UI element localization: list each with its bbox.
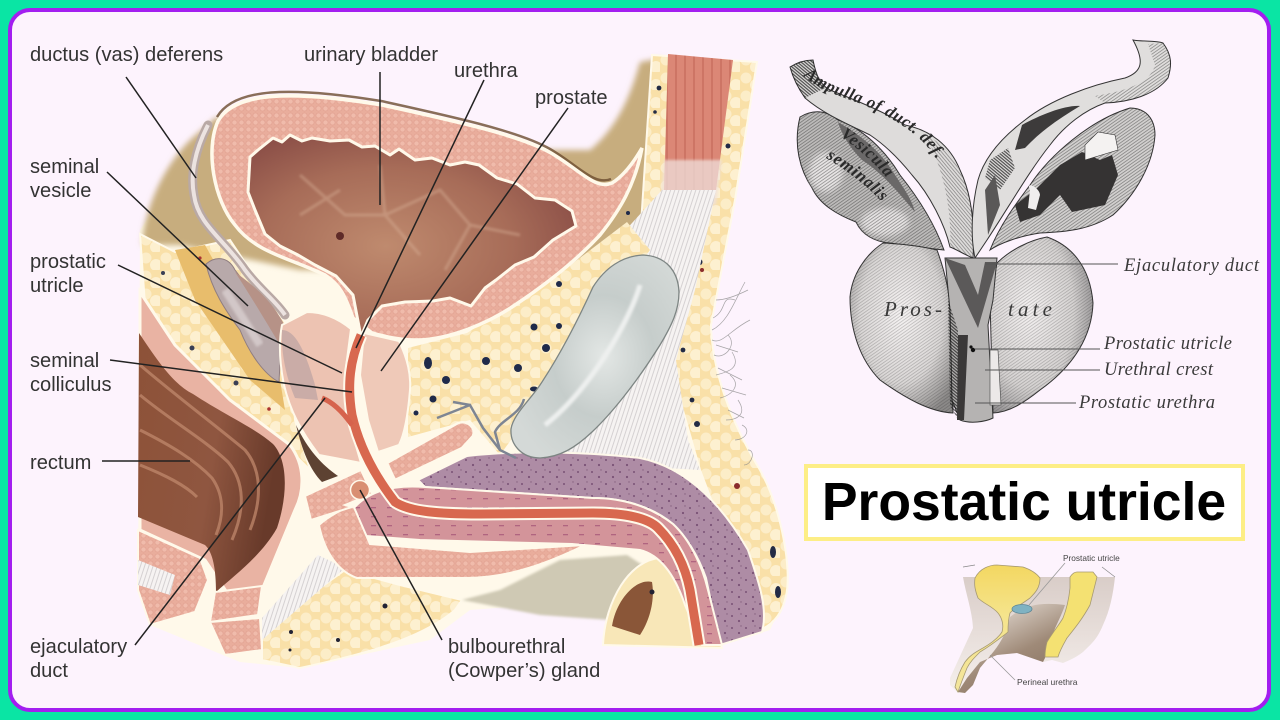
small labels <box>990 553 1120 687</box>
bladder lumen <box>248 135 576 337</box>
label: perineal urethra: Perineal urethra <box>1017 677 1078 687</box>
gray pubic symphysis <box>511 255 679 458</box>
prostate right lobe <box>990 237 1093 413</box>
pelvis body outline <box>950 565 1115 693</box>
cream base <box>138 55 788 668</box>
label: bulbourethral gland <box>360 490 600 682</box>
prevesical fat <box>408 211 650 455</box>
panel: pelvic anatomy illustration <box>138 54 788 668</box>
label: prostate: prostate <box>535 87 608 109</box>
label: ejaculatory duct: duct <box>30 660 68 682</box>
label: ductus deferens <box>30 44 223 178</box>
panel: engraving of prostate and seminal vesicles <box>789 39 1260 423</box>
dorsal vessels <box>437 399 524 458</box>
anal stripes <box>138 560 175 595</box>
label: ejaculatory duct: ejaculatory <box>30 636 127 658</box>
purple corpus cavernosum <box>418 452 764 645</box>
engraving labels <box>802 70 1260 413</box>
label: bulbourethral gland: bulbourethral <box>448 636 565 658</box>
panel: small urethra diagram <box>950 553 1120 693</box>
bulbourethral gland <box>350 480 370 500</box>
utricle blue <box>1012 604 1032 614</box>
ductus deferens tube <box>193 125 285 315</box>
label: ductus deferens: ductus (vas) deferens <box>30 44 223 66</box>
label: seminalis: seminalis <box>826 152 887 200</box>
left seminal vesicle <box>797 112 944 250</box>
scrotal shadow area <box>462 555 650 620</box>
label: seminal colliculus: seminal <box>30 350 99 372</box>
label: ejaculatory duct: Ejaculatory duct <box>1123 256 1260 276</box>
label: vesicula: Vesicula <box>843 128 892 177</box>
label: prostatic utricle: prostatic <box>30 251 106 273</box>
anal sphincter blocks <box>138 530 262 655</box>
hair <box>712 282 752 465</box>
label: seminal colliculus <box>30 350 352 396</box>
urethra <box>322 335 699 645</box>
text: anatomy labels with leader lines <box>30 44 608 682</box>
label: prostatic utricle: utricle <box>30 275 84 297</box>
perineal muscle fan <box>262 555 345 640</box>
abdominal wall fat band <box>640 55 788 630</box>
label: seminal vesicle: seminal <box>30 156 99 178</box>
label: pros: Pros- <box>883 297 942 321</box>
label: prostatic utricle: Prostatic utricle <box>1103 334 1232 354</box>
label: urethral crest: Urethral crest <box>1104 360 1214 380</box>
label: prostatic utricle <box>30 251 342 373</box>
perineal fat <box>262 570 462 668</box>
label: ampulla: Ampulla of duct. def. <box>802 70 944 158</box>
testis ring <box>603 558 722 648</box>
label: prostatic utricle: Prostatic utricle <box>1063 553 1120 563</box>
left ampulla <box>790 60 974 258</box>
label: tate: tate <box>1008 297 1052 321</box>
seminal vesicle <box>206 259 287 382</box>
rectum in yellow <box>1045 572 1097 657</box>
left fat <box>140 234 310 470</box>
rectal wall <box>140 292 302 594</box>
label: ejaculatory duct <box>30 398 325 682</box>
title box: Prostatic utricle <box>822 473 1226 532</box>
dark recess <box>296 425 338 482</box>
label: urethra: urethra <box>454 60 518 82</box>
label: seminal colliculus: colliculus <box>30 374 112 396</box>
upper pink bar <box>387 422 474 480</box>
label: prostatic urethra: Prostatic urethra <box>1078 393 1215 413</box>
perineal membrane muscle <box>305 470 372 520</box>
right open vesicle <box>990 108 1155 250</box>
corpus spongiosum <box>353 487 722 645</box>
bladder wall <box>212 92 642 340</box>
right duct and ampulla <box>972 40 1171 258</box>
bulbospongiosus muscle <box>319 505 585 578</box>
posterior prostate <box>280 312 361 463</box>
central ducts and urethra <box>945 258 1001 422</box>
label: bulbourethral gland: (Cowper’s) gland <box>448 660 600 682</box>
label: prostate <box>381 87 608 371</box>
label: seminal vesicle: vesicle <box>30 180 91 202</box>
anterior prostate <box>360 333 410 452</box>
label: urethra <box>356 60 518 348</box>
label: seminal vesicle <box>30 156 248 306</box>
tan peritoneal background <box>142 58 662 270</box>
rectum lumen <box>138 333 285 592</box>
bladder in yellow <box>955 565 1040 692</box>
prostate left lobe <box>850 243 953 413</box>
fibrous tissue stripes <box>560 190 716 470</box>
label: rectum: rectum <box>30 452 91 474</box>
rectus muscle <box>660 54 733 205</box>
label: urinary bladder: urinary bladder <box>304 44 438 66</box>
